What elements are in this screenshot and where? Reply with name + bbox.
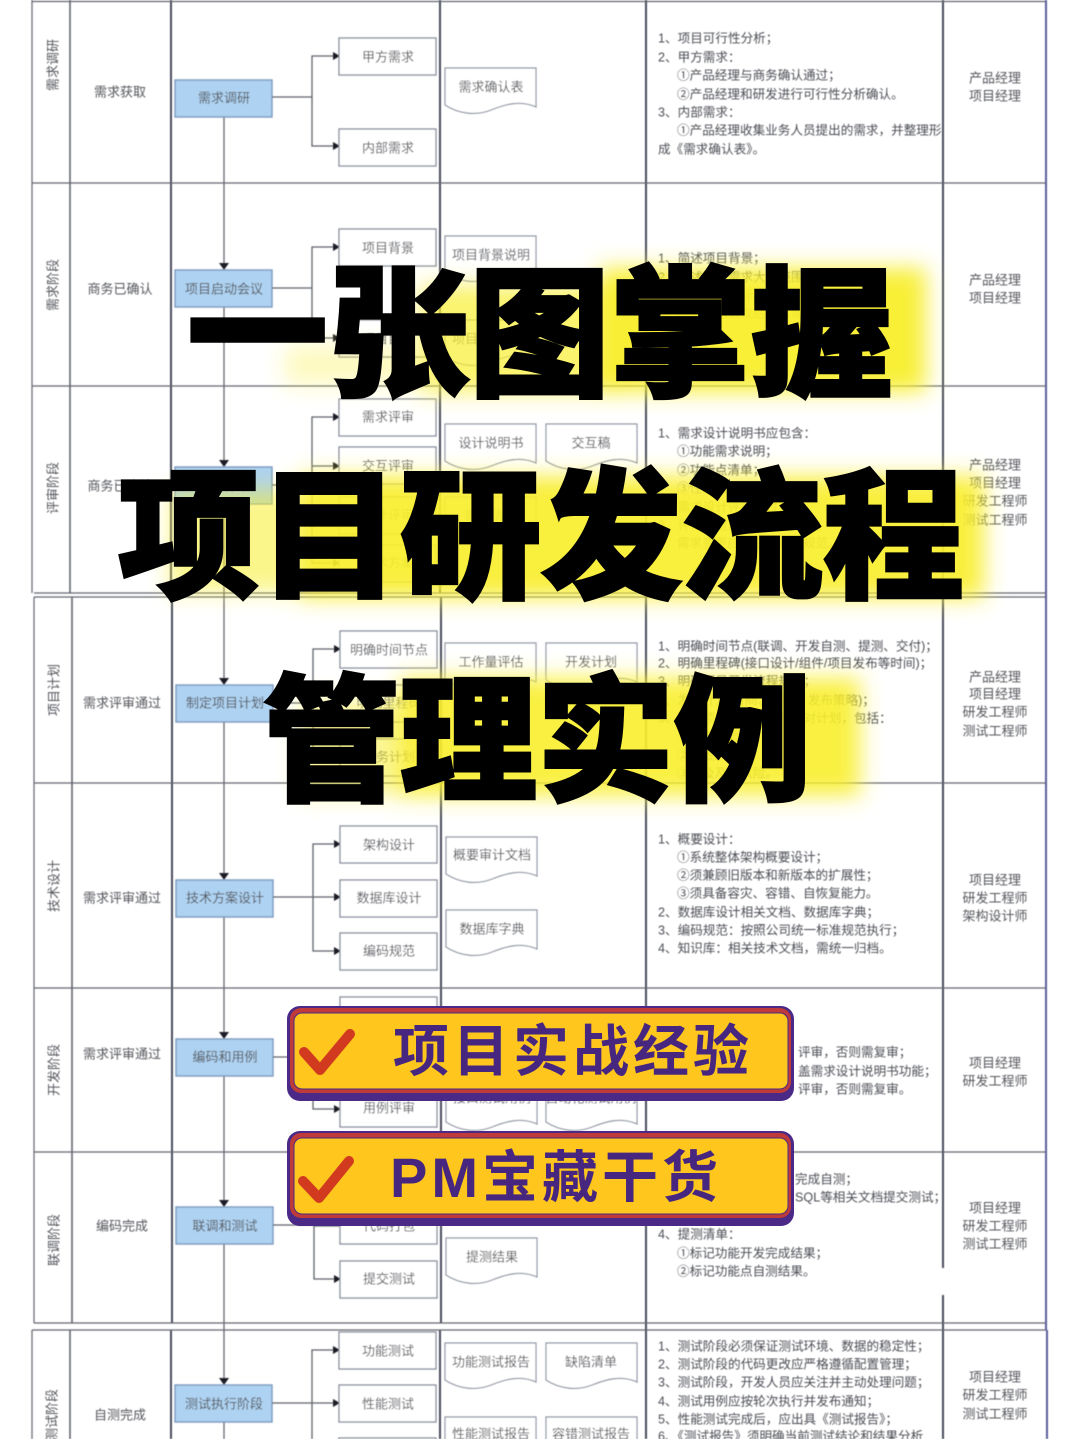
roles xyxy=(969,70,1021,104)
document xyxy=(445,236,536,281)
output box xyxy=(339,129,436,166)
output box xyxy=(340,631,437,668)
connector arrows xyxy=(273,1015,341,1113)
notes: ③涉及及时风险。 xyxy=(677,767,778,781)
notes: 2、甲方需求： xyxy=(658,50,741,65)
trigger: 编码完成 xyxy=(96,1218,148,1234)
trigger: 需求评审通过 xyxy=(83,1046,161,1062)
output box: 数据库设计 xyxy=(356,890,422,906)
notes: 2、需求设计评审通过； xyxy=(658,501,791,516)
output box: 内部需求 xyxy=(362,140,414,156)
notes: ②须兼顾旧版本和新版本的扩展性； xyxy=(677,868,878,884)
output box: 技术方案 xyxy=(362,556,414,570)
process box: 编码和用例 xyxy=(192,1050,258,1064)
output box: 架构设计 xyxy=(363,838,415,852)
roles xyxy=(962,458,1028,528)
output box: 编码开发 xyxy=(363,1008,415,1022)
process box: 制定项目计划 xyxy=(186,696,264,710)
output box: 交互评审 xyxy=(362,458,414,474)
document: 开发计划 xyxy=(565,654,617,670)
document: 项目目标说明 xyxy=(452,332,530,346)
notes: 完成自测； xyxy=(795,1173,858,1188)
output box xyxy=(340,685,437,722)
notes: ③须具备容灾、容错、自恢复能力。 xyxy=(677,886,878,901)
output box xyxy=(339,320,436,357)
trigger: 需求评审通过 xyxy=(83,696,161,710)
trigger: 需求评审通过 xyxy=(83,890,161,906)
document xyxy=(445,320,536,365)
connector arrows xyxy=(273,840,341,955)
document xyxy=(546,1417,637,1439)
process box: 联调和测试 xyxy=(192,1218,258,1234)
document xyxy=(546,643,637,688)
trigger: 自测完成 xyxy=(94,1408,146,1422)
process box xyxy=(176,1039,273,1076)
title highlight xyxy=(170,268,984,796)
badge text: 项目实战经验 xyxy=(393,1020,753,1083)
output box: 明确里程碑 xyxy=(356,696,422,710)
document: 缺陷清单 xyxy=(565,1354,617,1370)
document xyxy=(445,1417,536,1439)
notes: 5、明确项目风险及风险应对计划，包括： xyxy=(658,711,892,726)
process box xyxy=(175,270,272,307)
connector arrows xyxy=(273,1225,341,1283)
process box xyxy=(175,467,272,504)
row: 联调阶段 xyxy=(46,1173,1028,1298)
document: 交互稿 xyxy=(571,436,611,450)
document: 项目背景说明 xyxy=(452,248,530,262)
output box xyxy=(339,1332,436,1369)
roles: 研发工程师 xyxy=(962,1218,1028,1234)
process box xyxy=(176,880,273,917)
roles: 研发工程师 xyxy=(962,890,1028,906)
phase label: 开发阶段 xyxy=(46,1044,62,1096)
output box: 用例评审 xyxy=(363,1100,415,1116)
output box: 需求评审 xyxy=(362,410,414,424)
roles xyxy=(962,670,1028,738)
notes: 3、评审通过后进入下一阶段； xyxy=(658,519,829,534)
notes: ①标记功能开发完成结果； xyxy=(677,1246,828,1262)
document: 设计说明书 xyxy=(458,436,524,450)
document xyxy=(545,1085,637,1130)
icon: check mark xyxy=(304,1034,350,1070)
notes: 4、项目启动会议后进入需求评审。 xyxy=(658,307,854,321)
output box: 项目背景 xyxy=(362,240,414,256)
notes: 1、需求设计说明书应包含： xyxy=(658,426,816,441)
roles: 项目经理 xyxy=(969,1370,1021,1384)
output box xyxy=(339,399,436,436)
notes: ①系统整体架构概要设计； xyxy=(677,851,828,866)
notes xyxy=(798,1046,937,1097)
row: 开发阶段 xyxy=(46,997,1028,1130)
document xyxy=(546,424,637,469)
title: 管理实例 xyxy=(263,667,811,820)
connector arrows xyxy=(272,243,340,342)
output box xyxy=(339,497,436,534)
notes: ②产品经理和研发进行可行性分析确认。 xyxy=(677,87,904,102)
notes: 评审，否则需复审。 xyxy=(798,1083,911,1097)
notes: 盖需求设计说明书功能； xyxy=(798,1065,937,1080)
output box xyxy=(339,447,436,484)
trigger: 商务已确认 xyxy=(87,282,153,296)
title xyxy=(118,257,964,820)
roles xyxy=(962,872,1028,924)
output box xyxy=(340,1090,437,1127)
notes: 2、讲述项目需求大致范围； xyxy=(658,271,816,286)
roles: 产品经理 xyxy=(969,272,1021,288)
document: 接口测试用例 xyxy=(453,1090,531,1106)
notes xyxy=(658,1173,946,1279)
notes: 1、测试阶段必须保证测试环境、数据的稳定性； xyxy=(658,1339,929,1355)
trigger: 需求获取 xyxy=(94,84,146,100)
phase label: 技术设计 xyxy=(46,860,62,912)
notes xyxy=(658,1339,929,1439)
trigger: 商务已确认 xyxy=(87,478,153,494)
phase label: 需求调研 xyxy=(46,39,60,91)
process box xyxy=(175,1385,272,1422)
roles: 研发工程师 xyxy=(962,704,1028,720)
roles: 研发工程师 xyxy=(962,1074,1028,1088)
roles: 项目经理 xyxy=(969,1056,1021,1070)
document: 数据库字典 xyxy=(459,922,525,936)
notes: 1、概要设计： xyxy=(658,833,741,847)
notes: ①人员风险； xyxy=(677,731,753,746)
notes xyxy=(658,32,942,157)
roles: 测试工程师 xyxy=(962,512,1028,528)
notes: 3、编码规范：按照公司统一标准规范执行； xyxy=(658,923,904,939)
notes: 评审，否则需复审； xyxy=(798,1046,911,1061)
output box xyxy=(340,826,437,863)
document xyxy=(445,68,536,113)
notes: 3、明确项目开发流程规范； xyxy=(658,674,816,690)
notes: 2、明确里程碑(接口设计/组件/项目发布等时间)； xyxy=(658,656,932,672)
notes: 需求变更应走变更管理规范。 xyxy=(677,536,841,551)
connector arrows xyxy=(272,413,340,567)
roles: 项目经理 xyxy=(969,88,1021,104)
connector arrows xyxy=(272,52,340,150)
phase label: 项目计划 xyxy=(46,664,62,716)
output box: 提交测试 xyxy=(363,1272,415,1286)
output box xyxy=(339,545,436,582)
notes: 4、知识库：相关技术文档，需统一归档。 xyxy=(658,941,892,956)
output box: 功能测试 xyxy=(362,1344,414,1358)
process box xyxy=(175,80,272,117)
roles: 测试工程师 xyxy=(962,1236,1028,1252)
output box: 代码打包 xyxy=(363,1218,415,1234)
notes: 3、明确项目目标、里程碑及交付物； xyxy=(658,288,867,304)
process box: 项目启动会议 xyxy=(185,282,263,296)
notes xyxy=(658,639,938,781)
notes xyxy=(658,252,867,321)
output box xyxy=(340,933,437,970)
roles: 项目经理 xyxy=(969,872,1021,888)
icon: check mark xyxy=(303,1161,349,1198)
notes: ②标记功能点自测结果。 xyxy=(677,1265,816,1279)
output box: 任务计划 xyxy=(363,750,415,764)
output box xyxy=(339,1385,436,1422)
roles xyxy=(962,1056,1028,1088)
connector arrows xyxy=(272,1346,340,1439)
notes: ①产品经理收集业务人员提出的需求，并整理形 xyxy=(677,123,942,138)
roles: 测试工程师 xyxy=(962,724,1028,738)
document: 需求确认表 xyxy=(458,80,524,94)
notes: 3、内部需求： xyxy=(658,106,741,120)
output box xyxy=(339,38,436,75)
notes xyxy=(658,833,904,956)
row: 项目计划 xyxy=(46,631,1028,781)
document xyxy=(446,910,537,955)
document: 需求清单 xyxy=(465,508,517,524)
notes: ①功能需求说明； xyxy=(677,445,778,460)
document xyxy=(445,643,536,688)
output box xyxy=(340,1207,437,1244)
output box: 设计评审 xyxy=(362,508,414,522)
output box xyxy=(339,1438,436,1439)
row: 需求阶段 xyxy=(46,229,1021,365)
roles xyxy=(962,1200,1028,1252)
notes: 4、提测清单： xyxy=(658,1227,741,1242)
phase label: 需求阶段 xyxy=(46,259,60,311)
document: 概要审计文档 xyxy=(453,848,531,862)
notes: 4、发布计划(时间、方案、发布策略)； xyxy=(658,693,875,709)
notes: 4、测试用例应按轮次执行并发布通知； xyxy=(658,1394,879,1410)
document xyxy=(446,837,537,882)
roles: 测试工程师 xyxy=(962,1406,1028,1422)
notes: 1、项目可行性分析； xyxy=(658,32,778,47)
document: 功能测试报告 xyxy=(452,1354,530,1370)
notes: 成《需求确认表》。 xyxy=(658,143,765,157)
document xyxy=(445,497,536,542)
row: 评审阶段 xyxy=(46,399,1028,582)
roles xyxy=(969,272,1021,306)
roles: 架构设计师 xyxy=(962,908,1028,924)
process box: 需求调研 xyxy=(198,90,250,106)
notes: 3、测试阶段，开发人员应关注并主动处理问题； xyxy=(658,1375,929,1391)
notes: 2、测试阶段的代码更改应严格遵循配置管理； xyxy=(658,1357,917,1373)
document: 自动化测试用例 xyxy=(545,1090,637,1106)
document xyxy=(446,1238,537,1283)
title: 一张图掌握 xyxy=(187,257,892,415)
phase label: 评审阶段 xyxy=(46,462,60,514)
notes: SQL等相关文档提交测试； xyxy=(795,1190,946,1206)
document xyxy=(546,1343,637,1388)
output box: 性能测试 xyxy=(362,1396,414,1412)
process box xyxy=(176,685,273,722)
roles: 产品经理 xyxy=(969,70,1021,86)
roles: 研发工程师 xyxy=(962,1388,1028,1402)
roles: 产品经理 xyxy=(969,458,1021,472)
document: 工作量评估 xyxy=(458,654,524,670)
process box: 需求评审 xyxy=(198,478,250,494)
row: 技术设计 xyxy=(46,826,1028,970)
phase label: 联调阶段 xyxy=(46,1214,62,1266)
badge text: PM宝藏干货 xyxy=(390,1146,722,1209)
output box: 编码规范 xyxy=(363,944,415,958)
document xyxy=(445,1343,536,1388)
connector arrows xyxy=(273,645,341,761)
document xyxy=(446,1085,537,1130)
notes: 2、数据库设计相关文档、数据库字典； xyxy=(658,905,879,921)
notes: 5、性能测试完成后，应出具《测试报告》； xyxy=(658,1412,898,1428)
roles xyxy=(962,1370,1028,1422)
output box xyxy=(339,229,436,266)
notes: ②功能点清单； xyxy=(677,464,765,479)
document xyxy=(445,424,536,469)
output box xyxy=(340,997,437,1034)
badge: 项目实战经验 xyxy=(287,1006,794,1101)
output box xyxy=(340,880,437,917)
title: 项目研发流程 xyxy=(118,459,964,617)
process box: 测试执行阶段 xyxy=(185,1396,263,1412)
notes: ②进度风险； xyxy=(677,748,753,764)
notes: 1、明确时间节点(联调、开发自测、提测、交付)； xyxy=(658,639,938,655)
notes: ③性能需求说明； xyxy=(677,482,778,497)
output box: 明确时间节点 xyxy=(350,642,428,658)
output box xyxy=(340,739,437,776)
output box: 甲方需求 xyxy=(362,50,414,64)
roles: 研发工程师 xyxy=(962,494,1028,508)
notes xyxy=(658,426,841,551)
notes: 1、简述项目背景； xyxy=(658,252,766,267)
roles: 项目经理 xyxy=(969,686,1021,702)
roles: 项目经理 xyxy=(969,476,1021,490)
output box xyxy=(340,1261,437,1298)
roles: 项目经理 xyxy=(969,290,1021,306)
document: 提测结果 xyxy=(466,1250,518,1264)
roles: 项目经理 xyxy=(969,1200,1021,1216)
notes: ①产品经理与商务确认通过； xyxy=(677,68,841,84)
process box xyxy=(176,1207,273,1244)
roles: 产品经理 xyxy=(969,670,1021,684)
row: 测试阶段 xyxy=(44,1332,1028,1439)
process box: 技术方案设计 xyxy=(186,890,264,906)
badge: PM宝藏干货 xyxy=(287,1131,794,1226)
output box: 项目目标 xyxy=(362,332,414,346)
